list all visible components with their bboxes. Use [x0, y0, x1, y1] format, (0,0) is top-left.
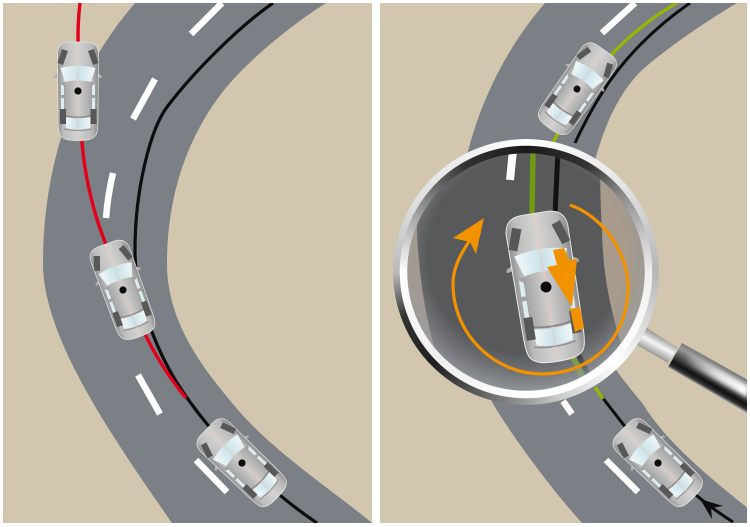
- magnified dash: [510, 150, 513, 180]
- car: middle: [90, 240, 156, 340]
- road: left curve: [43, 3, 372, 523]
- rotation arrowhead: [453, 218, 484, 254]
- skid line: red: [78, 3, 186, 398]
- rotation arc: [453, 205, 628, 374]
- magnifier handle: [637, 328, 748, 414]
- braked wheel: [570, 307, 584, 332]
- ideal line: black: [135, 3, 317, 523]
- braking force arrow: [547, 248, 577, 307]
- panel: right road diagram: [380, 3, 750, 527]
- lane dashes: [563, 3, 638, 492]
- magnifier metal ring: [393, 139, 659, 405]
- magnifier lens: [407, 153, 645, 391]
- car: top: [54, 42, 102, 140]
- ideal line: black: [575, 3, 733, 522]
- magnified black line: [555, 150, 589, 376]
- direction arrowhead: [701, 500, 723, 519]
- panel: left road diagram: [3, 3, 372, 523]
- lens vignette: [406, 152, 646, 392]
- magnified car: [506, 210, 585, 364]
- magnified road: [417, 153, 621, 390]
- controlled line: green: [553, 3, 677, 399]
- car: upper: [538, 42, 617, 135]
- lane dashes: [106, 3, 227, 492]
- car: bottom: [196, 418, 287, 508]
- car: lower: [612, 418, 703, 508]
- road: right curve: [454, 3, 750, 527]
- magnified green line: [532, 150, 584, 380]
